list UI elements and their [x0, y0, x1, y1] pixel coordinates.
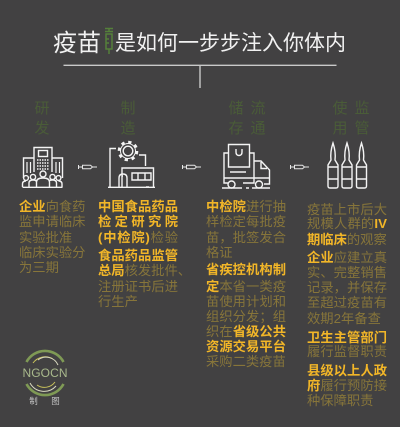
text column: logistics and storage: 样检定每批疫	[206, 214, 286, 229]
arrow: syringe 2	[182, 165, 201, 169]
text column: use and oversight: 规模人群的IV	[307, 216, 387, 231]
logo: NGOCN: 制	[29, 395, 38, 407]
stage label: logistics and storage: 通	[250, 120, 266, 137]
stage label: research: 发	[34, 120, 50, 137]
text column: manufacture: (中检院)检验	[98, 230, 178, 245]
stage label: use and oversight: 管	[354, 120, 370, 137]
logo: NGOCN: NGOCN	[22, 366, 68, 380]
text column: logistics and storage: 定本省一类疫	[206, 279, 286, 294]
text column: manufacture: 中国食品药品	[98, 199, 178, 214]
stage label: logistics and storage: 流	[250, 100, 266, 117]
icon: office building with people	[22, 148, 62, 187]
text column: logistics and storage: 织在省级公共	[206, 324, 286, 339]
stage label: manufacture	[120, 100, 136, 137]
text column: use and oversight: 府履行预防接	[307, 378, 387, 393]
stage label: use and oversight	[332, 100, 370, 137]
text column: use and oversight: 记录，并保存	[307, 280, 387, 295]
stage label: use and oversight: 监	[354, 100, 370, 117]
arrow: syringe 3	[290, 165, 309, 169]
stage label: research: 研	[34, 100, 50, 117]
stage label: use and oversight: 使	[332, 100, 348, 117]
text column: use and oversight: 疫苗上市后大	[307, 202, 387, 217]
text column: logistics and storage: 资源交易平台	[206, 339, 286, 354]
text column: logistics and storage: 中检院进行抽	[206, 199, 286, 214]
text column: logistics and storage: 苗使用计划和	[206, 294, 286, 309]
icon: factory with gear	[108, 142, 155, 187]
text column: research: 企业向食药	[19, 199, 85, 214]
stage label: manufacture: 造	[120, 120, 136, 137]
text column: use and oversight: 期临床的观察	[307, 232, 387, 247]
text column: use and oversight: 至超过疫苗有	[307, 295, 387, 310]
text column: use and oversight: 种保障职责	[307, 393, 373, 408]
text column: manufacture: 注册证书后进	[98, 279, 178, 294]
stage label: logistics and storage: 储	[228, 100, 244, 117]
text column: logistics and storage: 采购二类疫苗	[206, 354, 286, 369]
text column: research: 为三期	[19, 260, 59, 275]
text column: use and oversight: 县级以上人政	[307, 363, 387, 378]
icon: delivery truck with bag	[222, 144, 270, 188]
text column: research: 监申请临床	[19, 214, 85, 229]
title word: vaccine: 疫苗	[53, 30, 101, 57]
stage label: logistics and storage	[228, 100, 266, 137]
icon: three ampoules	[328, 143, 366, 188]
stage label: logistics and storage: 存	[228, 120, 244, 137]
title remainder: 是如何一步步注入你体内	[115, 32, 346, 55]
text column: logistics and storage: 格证	[206, 245, 233, 260]
text column: manufacture	[98, 199, 191, 309]
text column: logistics and storage: 省疾控机构制	[206, 262, 286, 277]
text column: logistics and storage	[206, 199, 286, 369]
text column: research: 临床实验分	[19, 245, 85, 260]
text column: use and oversight: 效期2年备查	[307, 311, 381, 326]
stage label: use and oversight: 用	[332, 120, 348, 137]
text column: logistics and storage: 组织分发；组	[206, 309, 286, 324]
text column: use and oversight: 卫生主管部门	[307, 330, 387, 345]
text column: manufacture: 行生产	[98, 294, 138, 309]
logo: NGOCN: 图	[51, 395, 60, 407]
text column: use and oversight: 实、完整销售	[307, 265, 387, 280]
text column: manufacture: 食品药品监管	[98, 248, 178, 263]
text column: use and oversight: 企业应建立真	[307, 250, 387, 265]
arrow: syringe 1	[78, 165, 97, 169]
text column: research: 实验批准	[19, 230, 72, 245]
text column: manufacture: 总局核发批件、	[98, 263, 191, 278]
text column: manufacture: 检定研究院	[98, 214, 178, 229]
text column: logistics and storage: 苗，批签发合	[206, 230, 286, 245]
title	[53, 30, 346, 57]
stage label: manufacture: 制	[120, 100, 136, 117]
text column: research	[19, 199, 85, 275]
text column: use and oversight: 履行监督职责	[307, 344, 387, 359]
stage label: research	[34, 100, 50, 137]
